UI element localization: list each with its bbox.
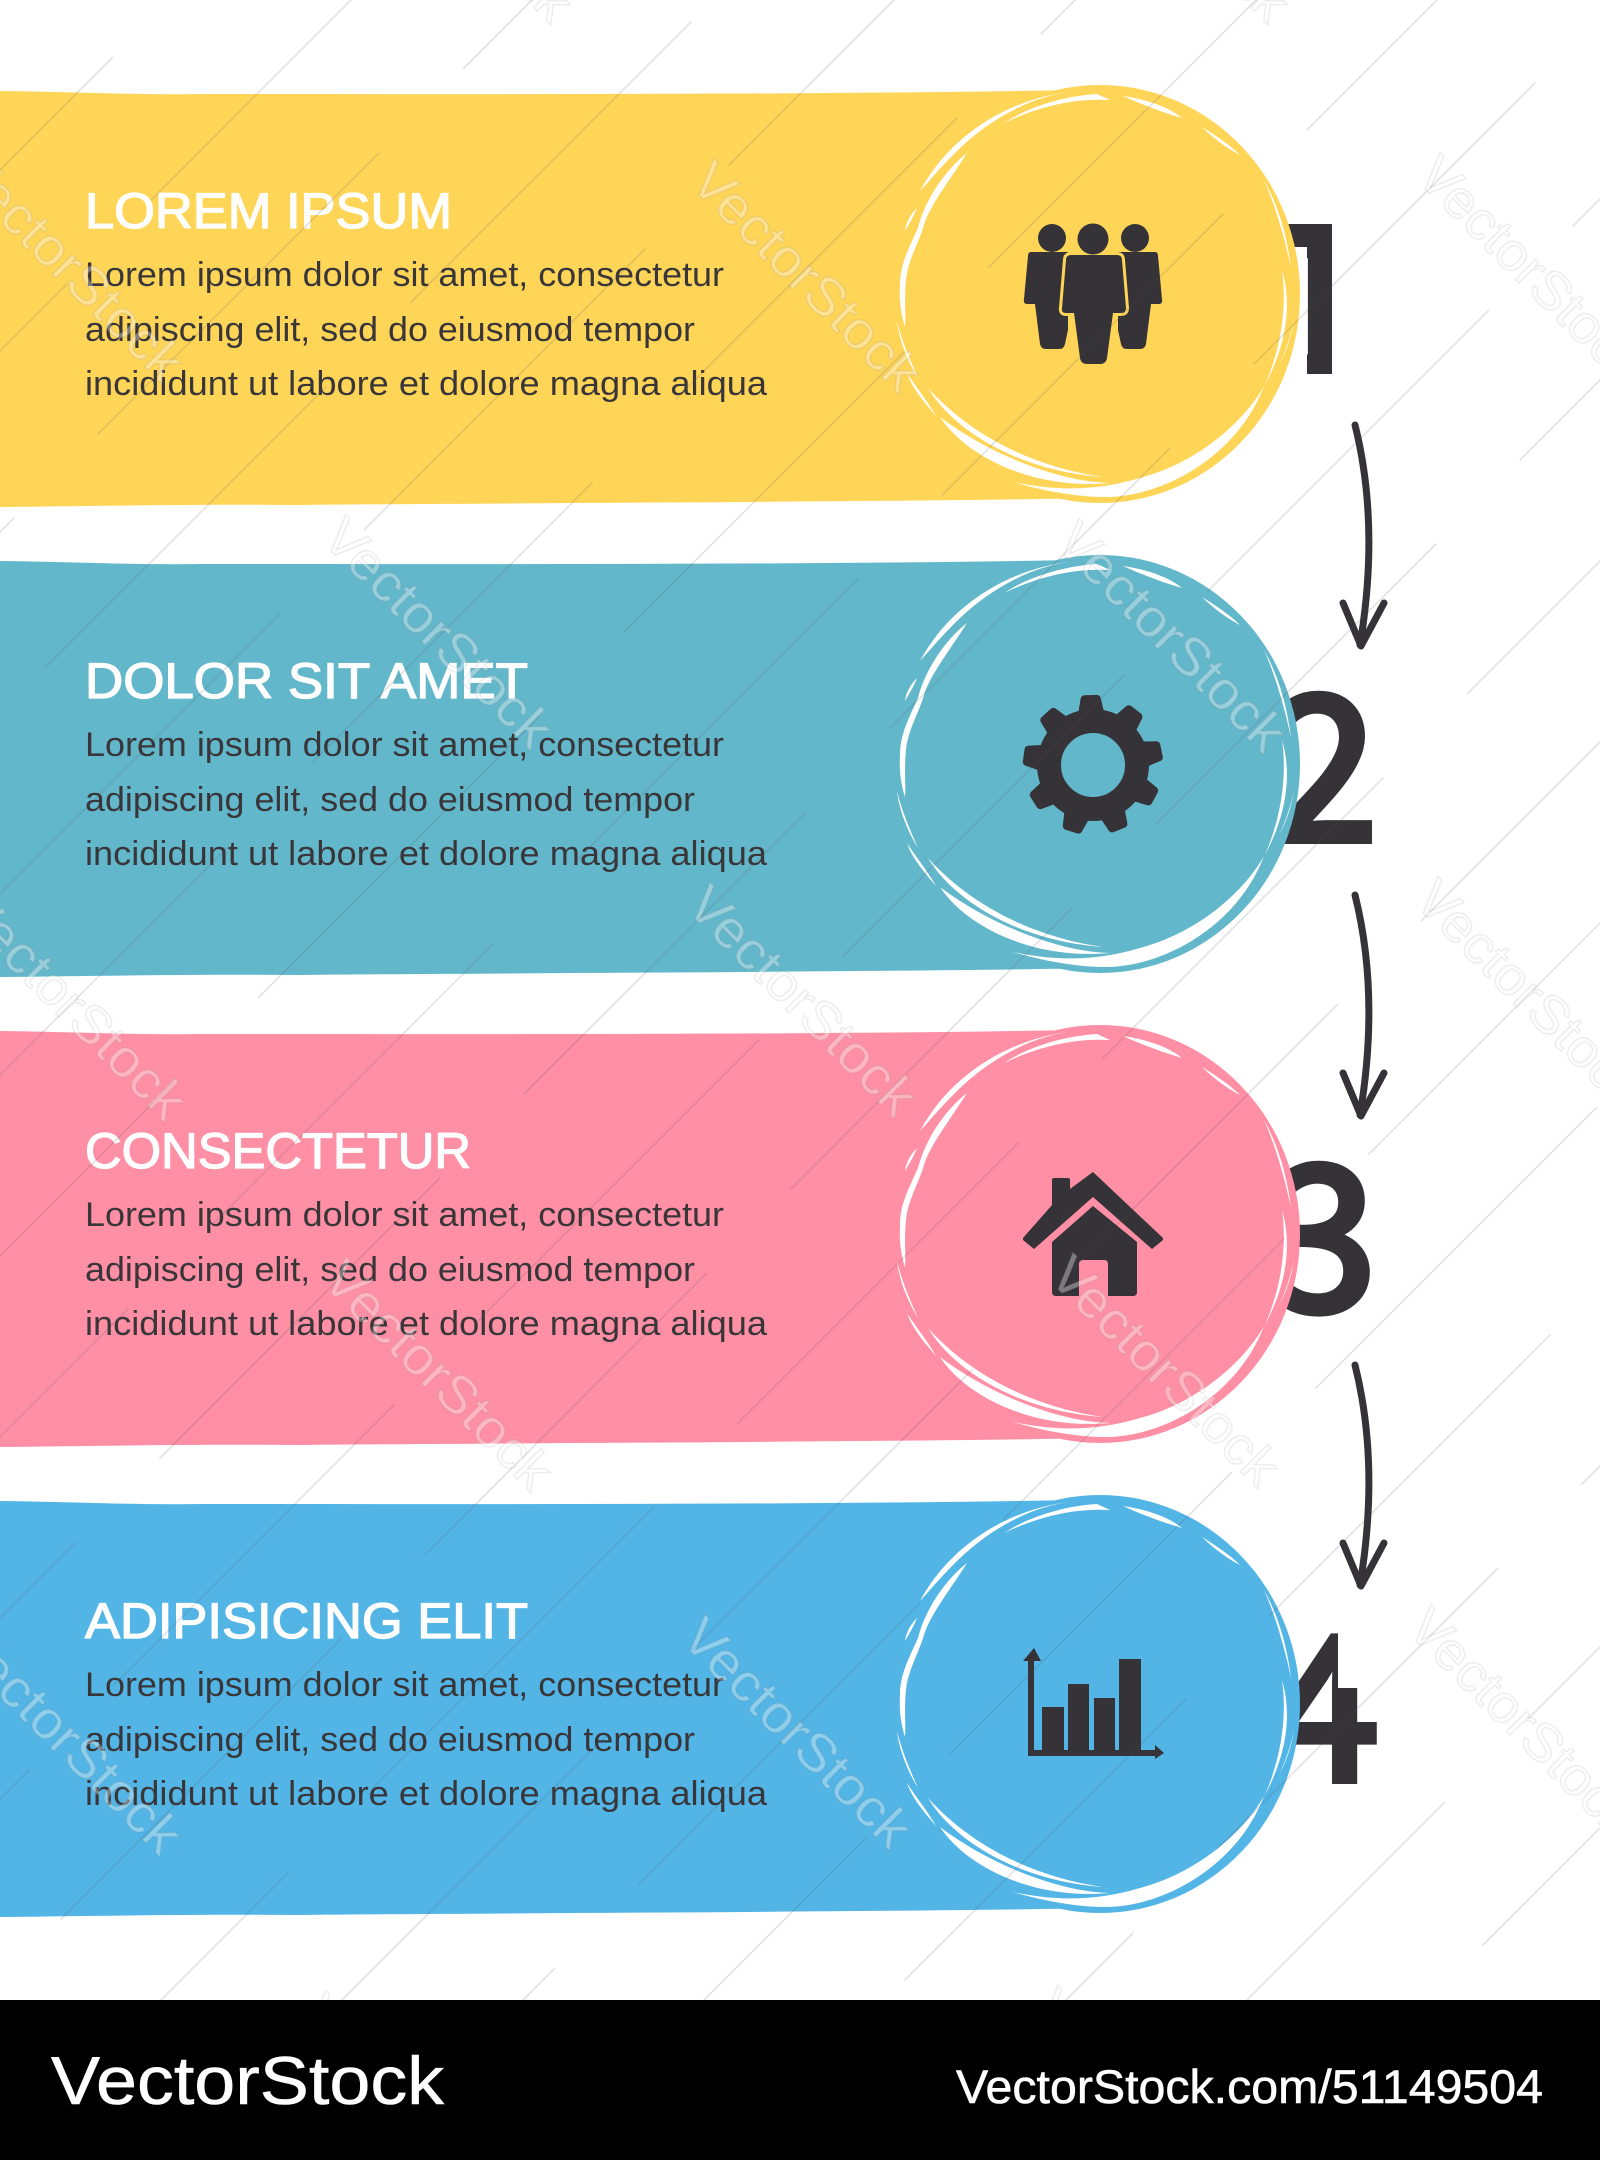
heading: dolor sit amet: DOLOR SIT AMET [85, 653, 528, 709]
watermarks: VectorStock [312, 1249, 564, 1502]
text block: step 4 body: Lorem ipsum dolor sit amet, consectetur [85, 1666, 724, 1704]
arrow: step 2 to 3 [1343, 895, 1384, 1116]
text block: step 1 body: Lorem ipsum dolor sit amet, consectetur [85, 256, 724, 294]
text block: step 3 body: incididunt ut labore et dolore magna aliqua [85, 1305, 767, 1343]
arrow: step 3 to 4 [1343, 1365, 1384, 1586]
icon: house [1023, 1172, 1163, 1296]
panel: step 1 banner [0, 85, 1373, 507]
text block: step 2 body: incididunt ut labore et dolore magna aliqua [85, 835, 767, 873]
icon: bar chart [1023, 1648, 1164, 1759]
number 4: 4 [1268, 1548, 1379, 1838]
banner: blue brush stroke [0, 1500, 1100, 1917]
text block: step 3 body: adipiscing elit, sed do eiusmod tempor [85, 1251, 695, 1289]
footer logo text: VectorStock [51, 2043, 445, 2119]
panel: step 3 banner [0, 1025, 1377, 1447]
number 1 [1288, 224, 1332, 374]
watermarks: VectorStock [680, 151, 932, 404]
text block: step 1 body: adipiscing elit, sed do eiusmod tempor [85, 311, 695, 349]
text block: step 4 body: adipiscing elit, sed do eiusmod tempor [85, 1721, 695, 1759]
heading: consectetur: CONSECTETUR [85, 1123, 471, 1179]
text block: step 3 body [85, 1196, 767, 1343]
icon: gear [1022, 695, 1164, 836]
watermarks: VectorStock [312, 507, 564, 760]
number 1: 1 [1262, 142, 1373, 432]
text block: step 3 body: Lorem ipsum dolor sit amet, consectetur [85, 1196, 724, 1234]
watermarks: VectorStock [676, 875, 928, 1128]
text block: step 2 body: adipiscing elit, sed do eiusmod tempor [85, 781, 695, 819]
circle: pink [897, 1025, 1300, 1443]
arrow: step 1 to 2 [1343, 425, 1384, 646]
panel: step 4 banner [0, 1495, 1379, 1917]
text block: step 2 body [85, 726, 767, 873]
text block: step 2 body: Lorem ipsum dolor sit amet, consectetur [85, 726, 724, 764]
icon: people [1024, 224, 1162, 364]
heading: adipisicing elit: ADIPISICING ELIT [85, 1593, 528, 1649]
circle: teal [897, 555, 1300, 973]
text block: step 4 body: incididunt ut labore et dolore magna aliqua [85, 1775, 767, 1813]
banner: yellow brush stroke [0, 90, 1100, 507]
watermarks: VectorStock [1039, 1245, 1291, 1498]
heading: lorem ipsum: LOREM IPSUM [85, 183, 452, 239]
watermarks: VectorStock [1045, 511, 1297, 764]
number 3: 3 [1266, 1078, 1377, 1368]
panel: step 2 banner [0, 555, 1378, 977]
number 2: 2 [1267, 608, 1378, 898]
text block: step 1 body [85, 256, 767, 403]
text block: step 4 body [85, 1666, 767, 1813]
circle: blue [897, 1495, 1300, 1913]
banner: teal brush stroke [0, 560, 1100, 977]
watermarks: VectorStock [671, 1607, 923, 1860]
text block: step 1 body: incididunt ut labore et dolore magna aliqua [85, 365, 767, 403]
footer url text: VectorStock.com/51149504 [956, 2060, 1543, 2113]
banner: pink brush stroke [0, 1030, 1100, 1447]
circle: yellow [897, 85, 1300, 503]
footer bar [0, 2000, 1600, 2160]
